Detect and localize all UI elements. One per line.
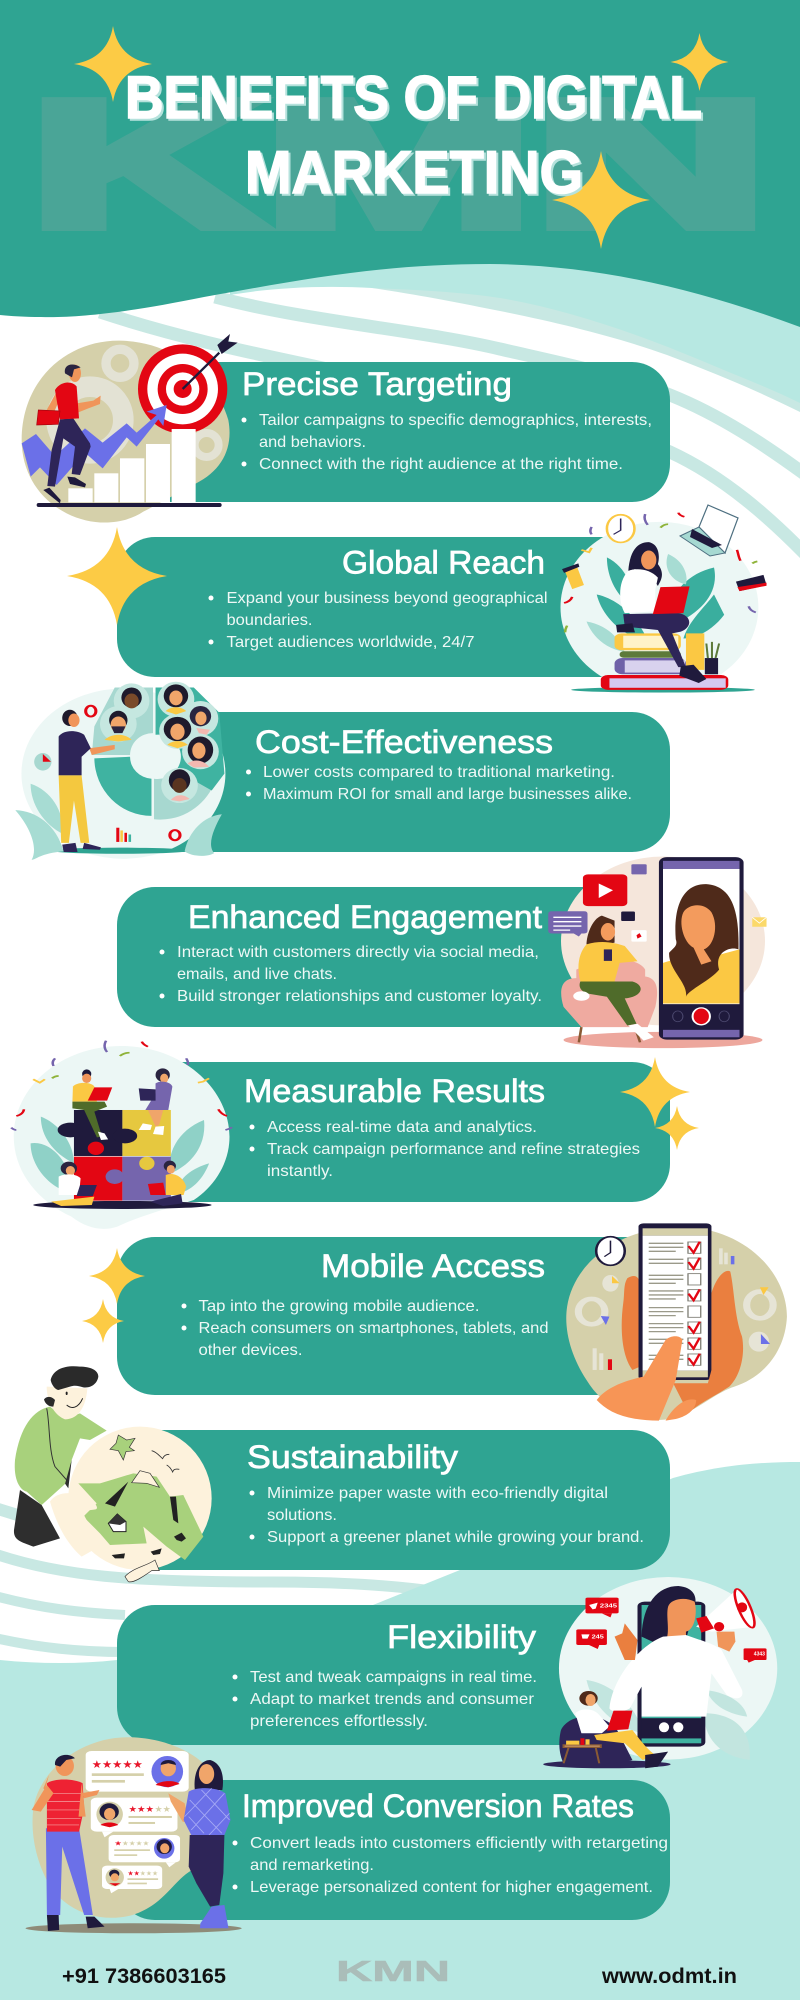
bullet list [160,944,542,1005]
illustration: runner and target [22,334,238,523]
icons: sparkles on Measurable Results [620,1057,699,1150]
panel: Flexibility card [117,1605,670,1745]
star ratings: ★ [114,1840,122,1848]
bullet list: other devices. [198,1342,302,1359]
badge labels: 245 [592,1635,604,1640]
header band [0,0,800,327]
star ratings: ★★★★★ [92,1759,143,1771]
bullet list: Expand your business beyond geographical [226,590,548,607]
panel: Cost-Effectiveness card [117,712,670,852]
bullet list: solutions. [267,1507,337,1524]
bullet list: and remarketing. [250,1857,374,1874]
footer: phone: +91 7386603165 [62,1965,226,1988]
illustration: woman and phone with video call [548,856,767,1048]
illustration: checklist on phone in hand [566,1223,787,1421]
illustration: person holding globe [14,1366,212,1582]
panel: Measurable Results card [117,1062,670,1202]
illustration: falling laptop [680,505,738,556]
bullet list: Minimize paper waste with eco-friendly digital [267,1485,608,1502]
illustration: customer reviews [26,1737,242,1933]
heading: Measurable Results [244,1073,545,1109]
heading: Cost-Effectiveness [255,724,553,760]
bullet list: Tailor campaigns to specific demographics, interests, [259,412,652,429]
title: MARKETING [245,139,583,206]
star ratings: ★★★ [140,1870,158,1878]
bullet list [246,764,632,803]
title [125,64,702,206]
panel: Sustainability card [117,1430,670,1570]
illustration: influencer with megaphone [543,1577,777,1768]
bullet list: Build stronger relationships and customer loyalty. [177,988,542,1005]
watermark KMN: KMN [29,64,768,265]
bullet list: Interact with customers directly via social media, [177,944,539,961]
footer: website: www.odmt.in [601,1965,737,1988]
badge labels [592,1603,765,1657]
bullet list: instantly. [267,1163,333,1180]
badge labels: 2345 [600,1603,618,1609]
star ratings: ★★★★ [122,1840,150,1848]
bullet list: preferences effortlessly. [250,1713,428,1730]
bullet list: and behaviors. [259,434,366,451]
bullet list: emails, and live chats. [177,966,337,983]
bullet list: Target audiences worldwide, 24/7 [226,634,475,651]
heading: Improved Conversion Rates [242,1788,634,1824]
bullet list: Leverage personalized content for higher engagement. [250,1879,653,1896]
star ratings [92,1759,171,1878]
bullet list [208,590,548,651]
background: lower light teal area [0,1462,800,2000]
heading: Flexibility [387,1619,536,1655]
star ratings: ★★★ [129,1804,154,1814]
bullet list: Adapt to market trends and consumer [250,1691,535,1708]
bullet list [250,1119,640,1180]
bullet list: Support a greener planet while growing your brand. [267,1529,644,1546]
bullet list: Track campaign performance and refine strategies [267,1141,640,1158]
heading: Global Reach [342,544,545,580]
illustration: customer segments donut [15,682,225,860]
bullet list [242,412,652,473]
bullet list: Convert leads into customers efficiently with retargeting [250,1835,668,1852]
bullet list: Connect with the right audience at the right time. [259,456,623,473]
panel: Global Reach card [117,537,670,677]
bullet list: Test and tweak campaigns in real time. [250,1669,537,1686]
bullet list [232,1669,537,1730]
icon: sparkle on Global Reach [67,527,167,625]
heading: Precise Targeting [242,366,512,402]
bullet list: Access real-time data and analytics. [267,1119,537,1136]
star ratings: ★★ [128,1870,140,1878]
panel: Precise Targeting card [117,362,670,502]
bullet list [250,1485,644,1546]
bullet list: Reach consumers on smartphones, tablets, and [198,1320,548,1337]
panel: Enhanced Engagement card [117,887,670,1027]
heading: Enhanced Engagement [188,899,542,935]
bullet list [232,1835,668,1896]
badge labels: 4343 [754,1652,765,1657]
bullet list [182,1298,548,1359]
heading: Mobile Access [321,1248,545,1284]
background: stripes [0,297,800,1652]
star ratings: ★★ [155,1804,171,1814]
panel: Improved Conversion Rates card [117,1780,670,1920]
bullet list: Maximum ROI for small and large businesses alike. [263,786,632,803]
illustration: woman with laptop on books [560,513,767,693]
bullet list: Lower costs compared to traditional marketing. [263,764,615,781]
title: BENEFITS OF DIGITAL [125,64,702,131]
footer: KMN logo: KMN [336,1956,450,1988]
bullet list: boundaries. [226,612,312,629]
icons: sparkles on Mobile Access [82,1248,145,1343]
heading: Sustainability [247,1439,458,1475]
illustration: team on puzzle pieces [11,1041,232,1229]
bullet list: Tap into the growing mobile audience. [198,1298,480,1315]
panel: Mobile Access card [117,1237,670,1395]
sparkle stars in header [74,26,728,249]
background: upper swoosh [230,250,800,412]
